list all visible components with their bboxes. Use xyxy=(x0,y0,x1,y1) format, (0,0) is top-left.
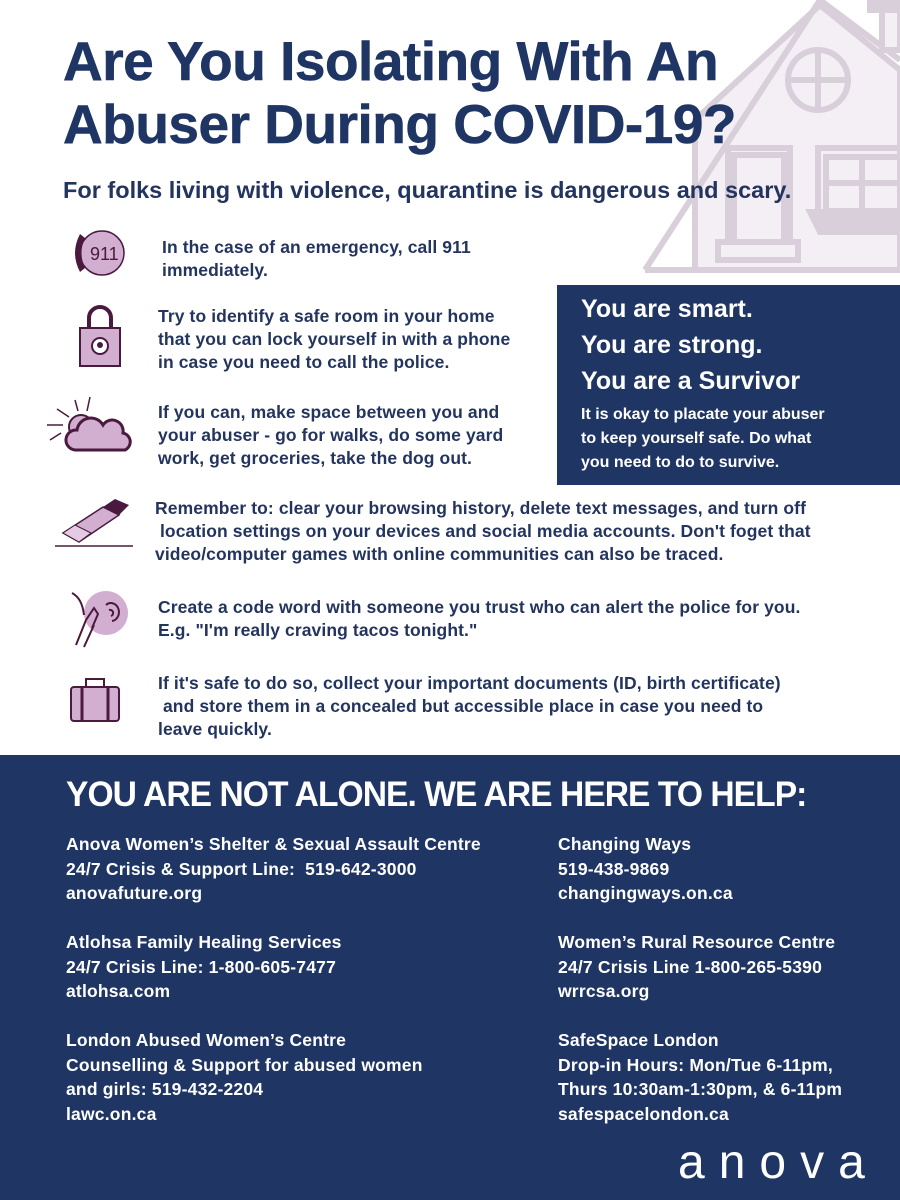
icon: 911 phone xyxy=(75,230,125,276)
tip 4: video/computer games with online communities can also be traced. xyxy=(155,544,723,564)
footer panel: resources xyxy=(0,755,900,1200)
tip 3: your abuser - go for walks, do some yard xyxy=(158,425,503,445)
footer heading: YOU ARE NOT ALONE. WE ARE HERE TO HELP: xyxy=(66,775,806,814)
title xyxy=(63,30,736,155)
callout: you are a survivor: to keep yourself safe. Do what xyxy=(581,430,811,447)
callout: you are a survivor: It is okay to placate your abuser xyxy=(581,406,825,423)
tip 6: and store them in a concealed but accessible place in case you need to xyxy=(163,696,763,716)
resources left: Anova Women’s Shelter & Sexual Assault Centre xyxy=(66,834,481,854)
resources right: Drop-in Hours: Mon/Tue 6-11pm, xyxy=(558,1054,833,1074)
logo: anova: anova xyxy=(678,1136,879,1189)
resources right: 519-438-9869 xyxy=(558,858,669,878)
icon: suitcase xyxy=(70,678,120,722)
title: Abuser During COVID-19? xyxy=(63,93,736,155)
resources right: wrrcsa.org xyxy=(558,981,649,1001)
callout: you are a survivor: you need to do to survive. xyxy=(581,454,779,471)
subtitle: For folks living with violence, quarantine is dangerous and scary. xyxy=(63,177,791,203)
tip 4: Remember to: clear your browsing history, delete text messages, and turn off xyxy=(155,498,806,518)
tip 2: in case you need to call the police. xyxy=(158,352,449,372)
tip 6: leave quickly. xyxy=(158,719,272,739)
resources left: anovafuture.org xyxy=(66,883,202,903)
resources right: changingways.on.ca xyxy=(558,883,733,903)
icon: lock xyxy=(79,305,121,367)
callout: you are a survivor xyxy=(557,285,900,485)
icon: eraser xyxy=(55,499,133,547)
icon: whisper xyxy=(72,591,128,648)
tip 5: Create a code word with someone you trust who can alert the police for you. xyxy=(158,597,800,617)
tip 4 xyxy=(155,498,811,564)
resources right: Women’s Rural Resource Centre xyxy=(558,932,835,952)
tip 2 xyxy=(158,306,510,372)
icon: 911 phone: 911 xyxy=(90,244,119,264)
callout: you are a survivor: You are a Survivor xyxy=(581,367,800,395)
resources right: SafeSpace London xyxy=(558,1030,719,1050)
resources left: 24/7 Crisis & Support Line: 519-642-3000 xyxy=(66,858,417,878)
icon: sun cloud xyxy=(47,396,132,452)
tip 1 xyxy=(162,237,471,280)
resources right: 24/7 Crisis Line 1-800-265-5390 xyxy=(558,956,822,976)
resources right: safespacelondon.ca xyxy=(558,1104,729,1124)
resources left: 24/7 Crisis Line: 1-800-605-7477 xyxy=(66,956,336,976)
resources right: Changing Ways xyxy=(558,834,691,854)
tip 5 xyxy=(158,597,800,640)
resources right: Thurs 10:30am-1:30pm, & 6-11pm xyxy=(558,1079,842,1099)
tip 2: that you can lock yourself in with a phone xyxy=(158,329,510,349)
tip 5: E.g. "I'm really craving tacos tonight." xyxy=(158,620,477,640)
tip 4: location settings on your devices and social media accounts. Don't foget that xyxy=(160,521,811,541)
callout: you are a survivor: You are strong. xyxy=(581,331,763,359)
tip 1: immediately. xyxy=(162,260,268,280)
resources left: Counselling & Support for abused women xyxy=(66,1054,423,1074)
resources left: and girls: 519-432-2204 xyxy=(66,1079,263,1099)
callout: you are a survivor: You are smart. xyxy=(581,295,753,323)
tip 3 xyxy=(158,402,503,468)
resources left: Atlohsa Family Healing Services xyxy=(66,932,342,952)
resources left: atlohsa.com xyxy=(66,981,170,1001)
tip 3: If you can, make space between you and xyxy=(158,402,499,422)
title: Are You Isolating With An xyxy=(63,30,718,92)
resources left xyxy=(66,834,481,1124)
resources left: London Abused Women’s Centre xyxy=(66,1030,346,1050)
house illustration xyxy=(642,0,900,273)
tip 3: work, get groceries, take the dog out. xyxy=(158,448,472,468)
resources right xyxy=(558,834,842,1124)
tip 6: If it's safe to do so, collect your important documents (ID, birth certificate) xyxy=(158,673,781,693)
resources left: lawc.on.ca xyxy=(66,1104,157,1124)
tip 1: In the case of an emergency, call 911 xyxy=(162,237,471,257)
tip 6 xyxy=(158,673,781,739)
tip 2: Try to identify a safe room in your home xyxy=(158,306,495,326)
